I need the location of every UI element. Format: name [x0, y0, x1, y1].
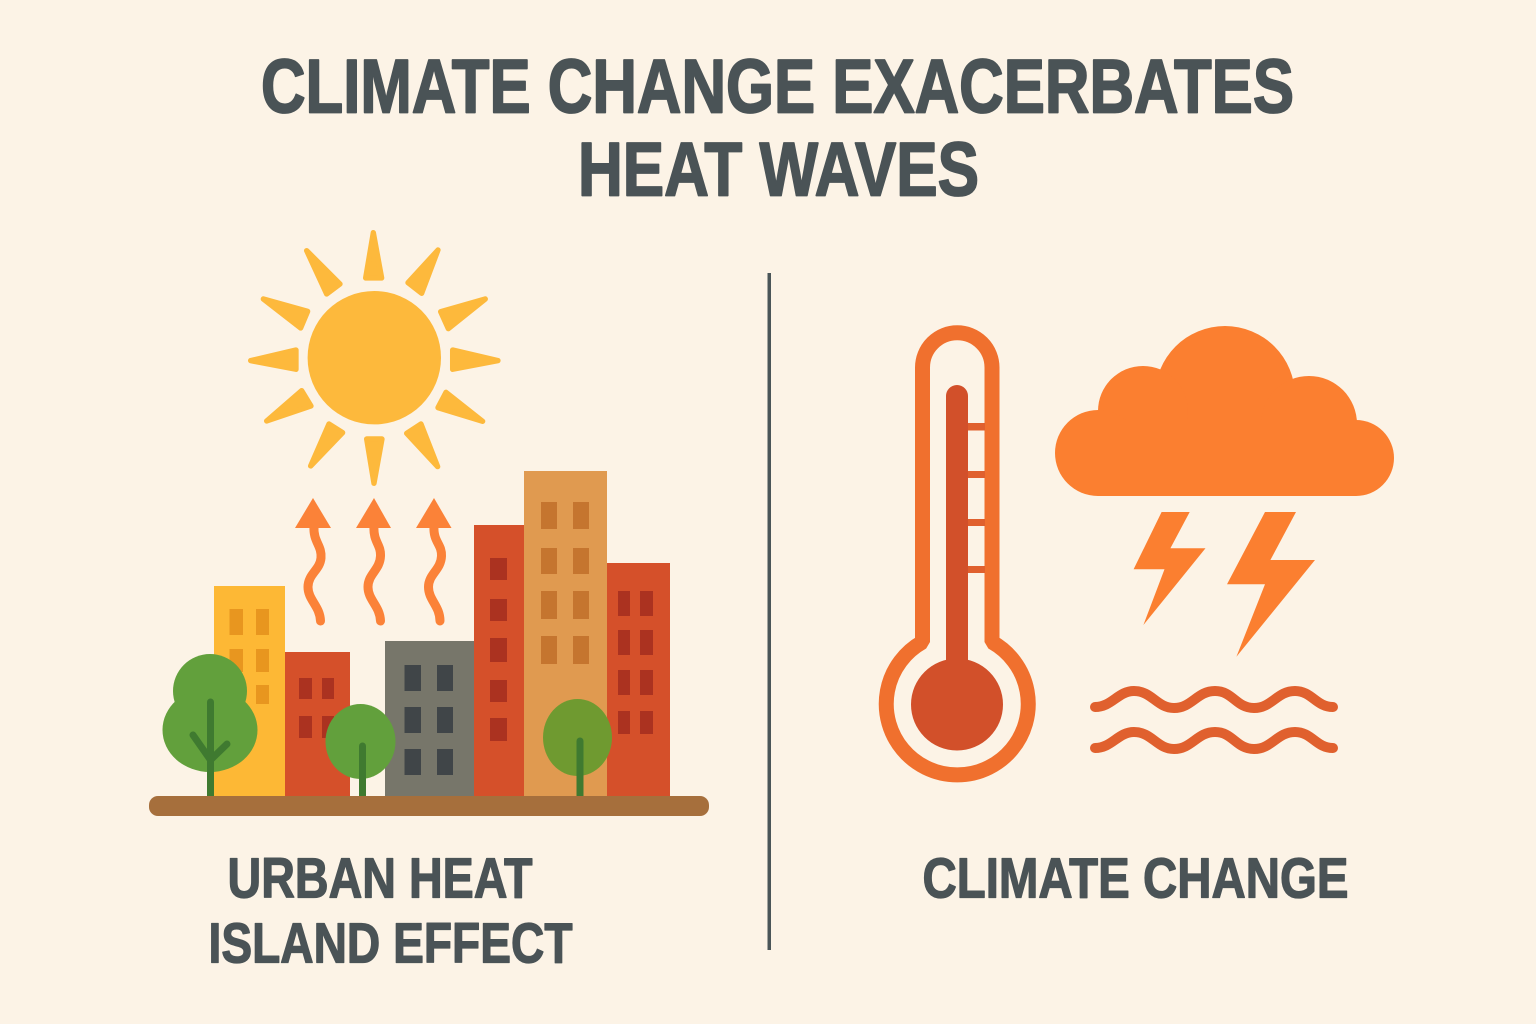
panel: urban heat island effect — [149, 233, 709, 976]
title: CLIMATE CHANGE EXACERBATES — [261, 44, 1294, 130]
building: yellow — [214, 586, 285, 796]
building: gray — [385, 641, 474, 796]
icon: thermometer — [886, 333, 1028, 775]
icon: storm cloud — [1055, 326, 1394, 496]
title — [261, 44, 1294, 212]
label: urban heat island effect: URBAN HEAT — [228, 846, 533, 910]
building: right red — [607, 563, 670, 796]
city buildings — [214, 471, 670, 796]
building: small red — [285, 652, 350, 796]
label: urban heat island effect — [208, 846, 573, 976]
building: tan tower — [524, 471, 607, 796]
icon: sun — [251, 233, 498, 483]
tree: small center — [326, 704, 396, 796]
tree: large left — [162, 654, 258, 796]
icon: large lightning bolt — [1227, 512, 1315, 657]
title: HEAT WAVES — [578, 128, 979, 212]
tree: right — [543, 699, 612, 796]
icon: heat waves — [1095, 691, 1333, 749]
building: tall red — [474, 525, 524, 796]
icon: rising heat arrows — [295, 498, 452, 621]
icon: small lightning bolt — [1134, 512, 1206, 625]
ground — [149, 796, 709, 816]
label: climate change: CLIMATE CHANGE — [922, 846, 1348, 910]
label: urban heat island effect: ISLAND EFFECT — [208, 912, 573, 976]
panel: climate change — [886, 326, 1394, 910]
divider — [768, 273, 771, 950]
